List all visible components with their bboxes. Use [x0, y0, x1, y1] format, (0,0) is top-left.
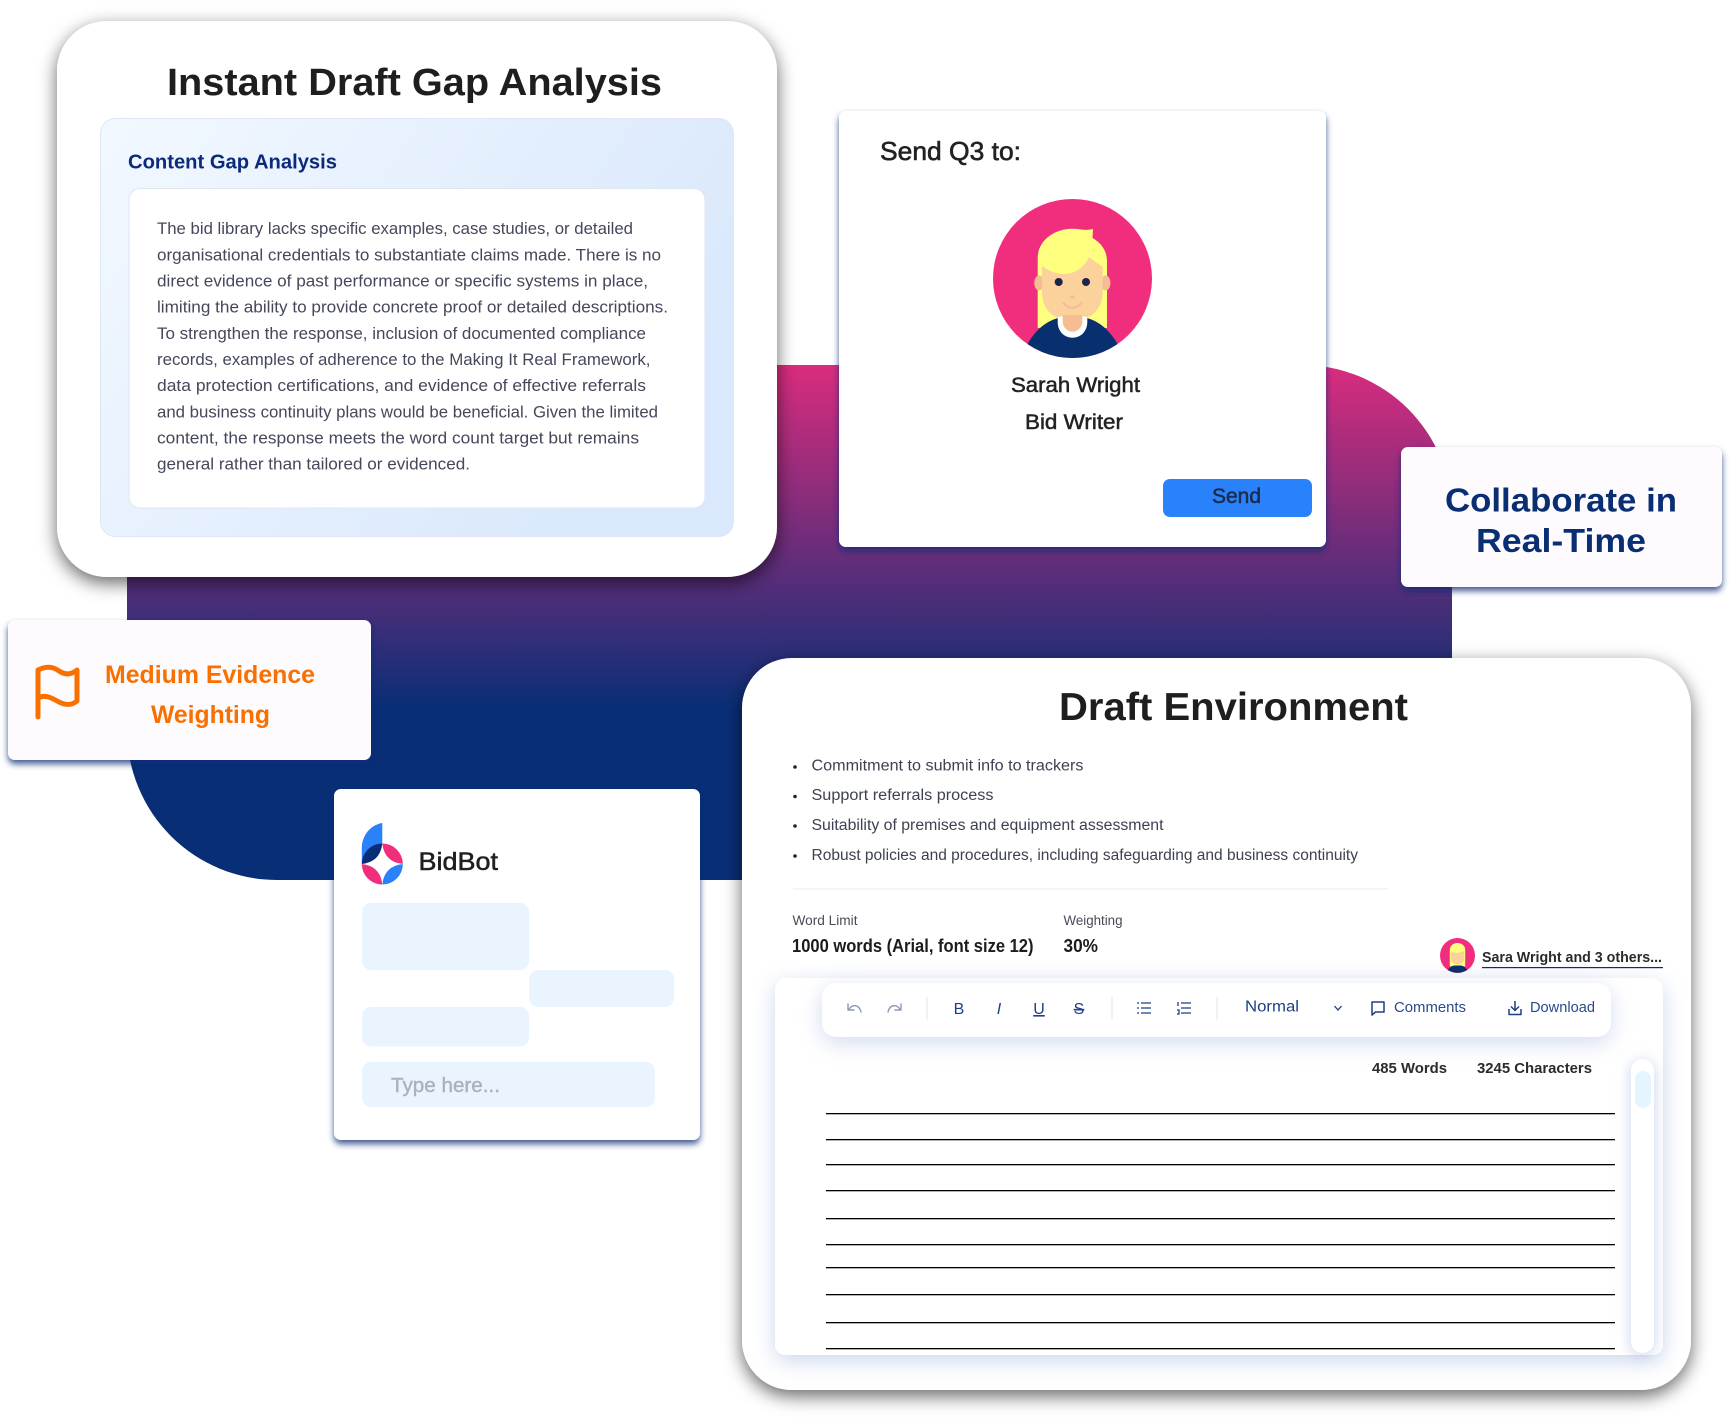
text box: analysis body: data protection certifications, and evidence of effective referrals: [157, 377, 646, 395]
text box: analysis body: and business continuity plans would be beneficial. Given the limited: [157, 403, 658, 421]
button: send: [1163, 479, 1312, 517]
label: medium evidence weighting: Weighting: [151, 701, 270, 729]
collaborators: sara wright and 3 others: Sara Wright and 3 others...: [1482, 949, 1662, 966]
heading: draft environment: Draft Environment: [1059, 686, 1408, 729]
word count: 485 Words: [1372, 1061, 1447, 1077]
chat bubble: first message: [362, 903, 529, 970]
field: word limit: Word Limit: [792, 913, 858, 928]
chat bubble: reply: [529, 970, 674, 1007]
text box: analysis body: The bid library lacks specific examples, case studies, or detailed: [157, 220, 633, 238]
format buttons: bold italic underline strike: I: [997, 1001, 1002, 1018]
icon: redo: [888, 1004, 901, 1012]
field: word limit: [792, 913, 1034, 956]
callout: collaborate in real-time: [1401, 447, 1722, 587]
text box: analysis body: direct evidence of past performance or specific systems in place,: [157, 272, 648, 290]
format buttons: bold italic underline strike: U: [1033, 1001, 1045, 1018]
panel: draft environment: [742, 658, 1691, 1390]
panel: send q3: [839, 111, 1326, 547]
text box: analysis body: To strengthen the response, inclusion of documented compliance: [157, 325, 646, 343]
callout: collaborate in real-time: Collaborate in: [1445, 482, 1677, 518]
text box: analysis body: records, examples of adherence to the Making It Real Framework,: [157, 351, 650, 369]
input: type here: Type here...: [391, 1074, 500, 1097]
logo text: bidbot: BidBot: [418, 848, 498, 876]
field: weighting: [1064, 913, 1122, 956]
icon: undo: [848, 1004, 861, 1012]
chat bubble: second message: [362, 1007, 529, 1046]
text box: analysis body: organisational credentials to substantiate claims made. There is no: [157, 246, 661, 264]
character count: 3245 Characters: [1477, 1061, 1592, 1077]
bullet list: Commitment to submit info to trackers: [812, 758, 1084, 775]
dropdown: normal: [1245, 999, 1342, 1016]
background gradient blob: [127, 365, 1452, 880]
role: bid writer: Bid Writer: [1025, 411, 1123, 434]
input: type here: [362, 1062, 655, 1107]
bullet list: Suitability of premises and equipment assessment: [812, 817, 1164, 834]
format buttons: bold italic underline strike: B: [954, 1001, 964, 1018]
panel: editor: [775, 978, 1663, 1355]
bullet list: Robust policies and procedures, including safeguarding and business continuity: [812, 847, 1358, 864]
icon: flag: [38, 667, 77, 717]
button: comments: Comments: [1394, 1000, 1466, 1016]
text box: analysis body: content, the response meets the word count target but remains: [157, 429, 639, 447]
text box: analysis body: [129, 188, 705, 508]
panel: content gap analysis: [100, 118, 734, 536]
bullet list: [793, 758, 1358, 864]
bullet list: Support referrals process: [812, 787, 994, 804]
format buttons: bold italic underline strike: S: [1074, 1001, 1084, 1018]
panel: bidbot chat: [334, 789, 700, 1140]
dropdown: normal: Normal: [1245, 999, 1299, 1016]
field: weighting: Weighting: [1064, 913, 1122, 928]
ruled writing lines: [826, 1113, 1615, 1349]
text box: analysis body: limiting the ability to provide concrete proof or detailed descriptions.: [157, 299, 668, 317]
callout: collaborate in real-time: Real-Time: [1476, 522, 1646, 559]
button: send: Send: [1212, 485, 1261, 508]
collaborators: sara wright and 3 others: [1440, 938, 1663, 973]
label: medium evidence weighting: Medium Evidence: [105, 661, 315, 689]
heading: instant draft gap analysis: Instant Draft Gap Analysis: [167, 62, 662, 104]
scrollbar: [1631, 1059, 1654, 1353]
heading: send q3 to: Send Q3 to:: [880, 136, 1021, 166]
icon: bullet list: [1137, 1003, 1151, 1013]
button: download: Download: [1530, 1000, 1595, 1016]
callout: medium evidence weighting: [8, 620, 371, 760]
panel: instant draft gap analysis: [57, 21, 777, 577]
text box: analysis body: general rather than tailored or evidenced.: [157, 456, 470, 474]
name: sarah wright: Sarah Wright: [1011, 374, 1140, 397]
format buttons: bold italic underline strike: [954, 1001, 1084, 1018]
subheading: content gap analysis: Content Gap Analysis: [128, 150, 337, 174]
field: weighting: 30%: [1064, 936, 1098, 956]
field: word limit: 1000 words (Arial, font size 12): [792, 936, 1034, 956]
avatar: sarah wright: [993, 199, 1152, 360]
icon: numbered list: [1177, 1002, 1191, 1014]
label: medium evidence weighting: [105, 661, 315, 729]
icon: bidbot logo: [362, 823, 403, 884]
toolbar: [822, 983, 1611, 1037]
